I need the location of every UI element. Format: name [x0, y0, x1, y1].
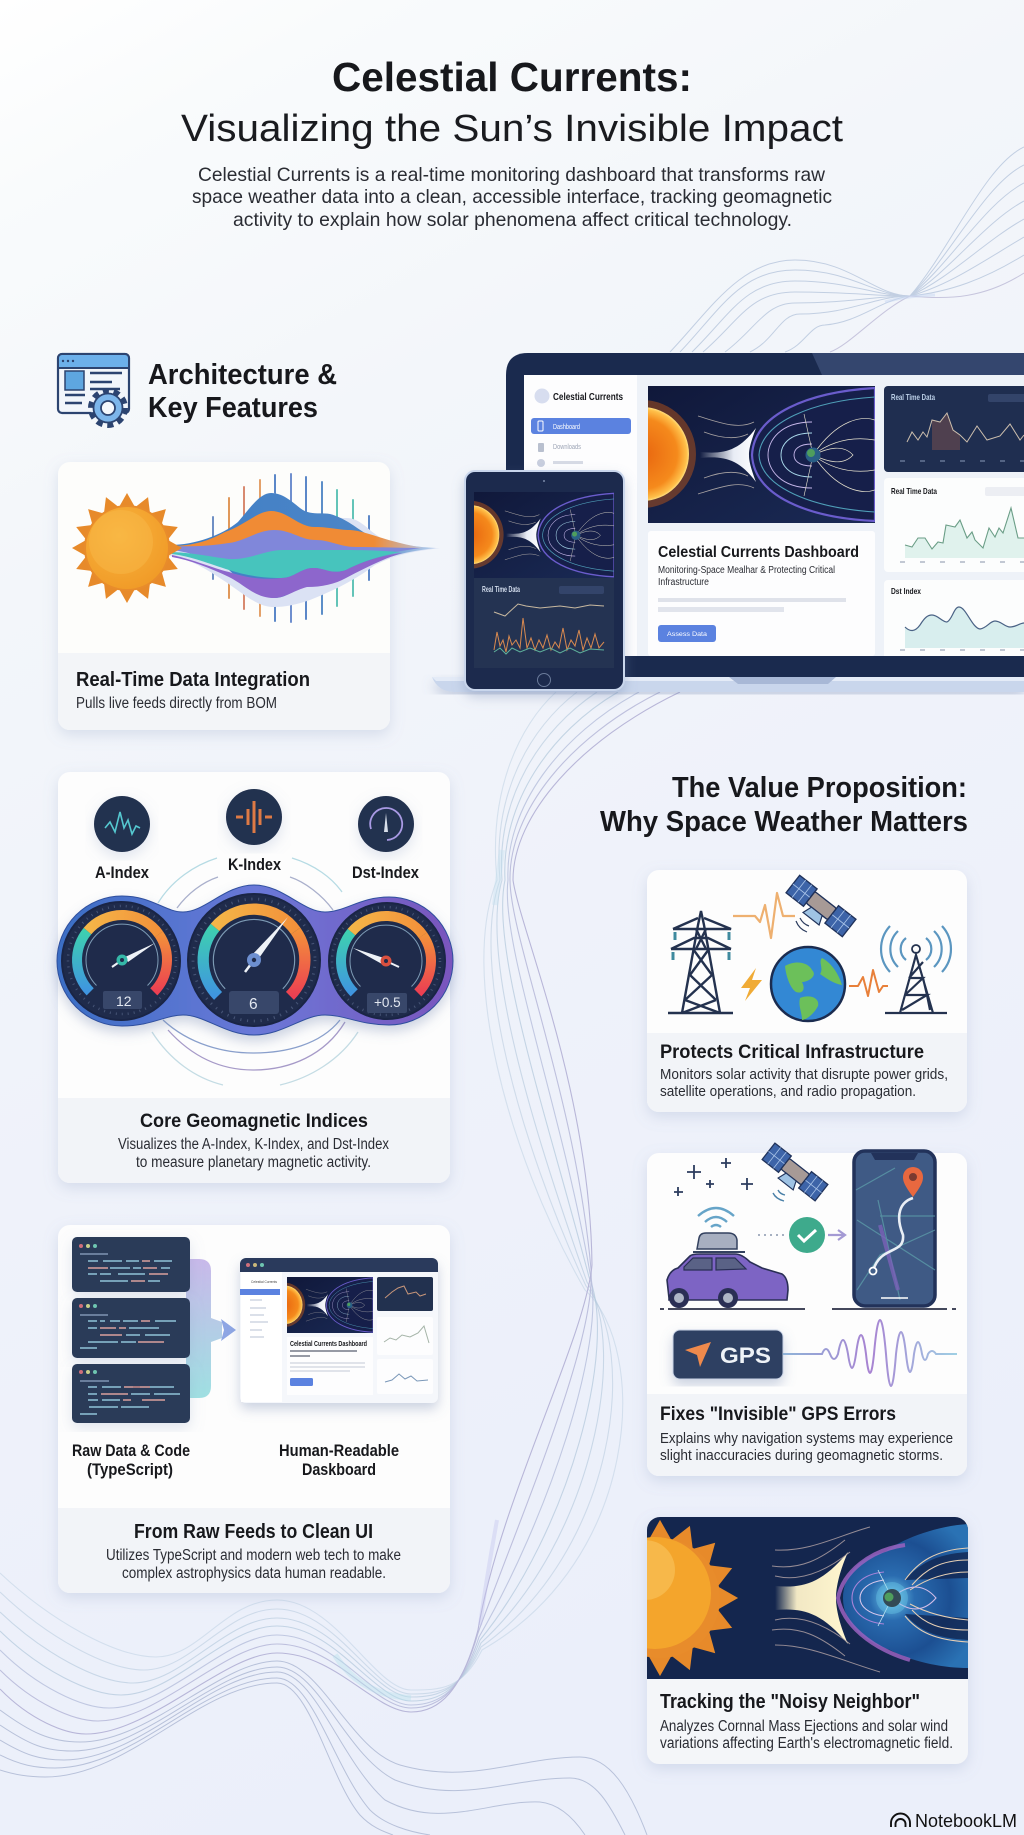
icon: car: [667, 1233, 788, 1308]
data stream bars: [213, 474, 369, 622]
gauge: A-index: [62, 902, 180, 1020]
card text: Real-Time Data Integration: [76, 669, 310, 691]
icon: lightning bolt: [741, 968, 762, 1001]
solar wind waveform: [170, 493, 440, 607]
panel: from raw feeds to clean UI: [58, 1225, 450, 1593]
panel: protects critical infrastructure: [647, 870, 967, 1112]
dashboard title card: Celestial Currents Dashboard: [658, 544, 859, 561]
icon: satellite: [783, 875, 856, 941]
sidebar: Downloads: [553, 444, 581, 451]
code panels: [72, 1237, 190, 1292]
dashboard title card: [648, 531, 875, 656]
gauge: K-index: 6: [249, 996, 258, 1013]
gauge cluster band: [57, 885, 453, 1035]
index labels: Dst-Index: [352, 863, 419, 882]
icon: architecture window and gear: [58, 354, 129, 425]
panel: core geomagnetic indices: to measure planetary magnetic activity.: [136, 1154, 371, 1171]
heading: value proposition: [600, 772, 968, 838]
gauge: Dst-index: +0.5: [374, 995, 401, 1010]
laptop dashboard: [432, 353, 1024, 692]
sidebar: [524, 375, 637, 656]
gauge: A-index: 12: [116, 993, 132, 1009]
panel: core geomagnetic indices: Visualizes the A-Index, K-Index, and Dst-Index: [118, 1136, 389, 1153]
icon: Dst-index: [358, 796, 414, 852]
mini dashboard: [240, 1258, 438, 1403]
chart: dst index: Dst Index: [891, 586, 921, 596]
chart: real time data dark: Real Time Data: [891, 392, 935, 402]
index labels: A-Index: [95, 863, 149, 882]
illustration: sun and magnetosphere: [647, 1517, 968, 1679]
logo: NotebookLM: NotebookLM: [915, 1810, 1017, 1831]
road lines: [660, 1308, 956, 1310]
panel: tracking the noisy neighbor: Analyzes Cornnal Mass Ejections and solar wind: [660, 1718, 948, 1735]
title: [181, 54, 843, 150]
icon: satellite: [759, 1143, 828, 1205]
icon: sun: [72, 493, 182, 603]
panel: fixes invisible GPS errors: [647, 1143, 967, 1476]
intro paragraph: activity to explain how solar phenomena affect critical technology.: [233, 209, 792, 231]
card text: Core Geomagnetic Indices: [140, 1110, 368, 1132]
panel: fixes invisible GPS errors: Explains why navigation systems may experience: [660, 1430, 953, 1447]
hero image: [588, 386, 875, 523]
index labels: [95, 855, 419, 882]
bracket arrow: [186, 1259, 236, 1398]
tablet dashboard: [437, 471, 624, 690]
panel: tracking the noisy neighbor: [644, 1517, 971, 1772]
card text: From Raw Feeds to Clean UI: [134, 1521, 373, 1543]
dashboard title card: Infrastructure: [658, 577, 709, 588]
chart: real time data light: Real Time Data: [891, 486, 937, 496]
title: Visualizing the Sun’s Invisible Impact: [181, 108, 843, 150]
icon: K-index: [226, 789, 282, 845]
diagram labels: Raw Data & Code: [72, 1441, 190, 1460]
title: Celestial Currents:: [332, 54, 692, 100]
diagram labels: (TypeScript): [87, 1460, 173, 1479]
GPS badge and wave: GPS: [720, 1343, 771, 1368]
heading: architecture and key features: [148, 359, 337, 424]
panel: real-time data integration: [58, 462, 440, 730]
dashboard title card: Monitoring-Space Mealhar & Protecting Critical: [658, 565, 835, 576]
intro paragraph: [192, 164, 832, 231]
icon: earth: [771, 947, 845, 1021]
icon: radio tower: [881, 926, 951, 1013]
mini dashboard: Celestial Currents: [251, 1279, 277, 1284]
chart: real time data light: [884, 478, 1024, 572]
panel: from raw feeds to clean UI: complex astrophysics data human readable.: [122, 1565, 386, 1582]
mini dashboard: Celestial Currents Dashboard: [290, 1341, 367, 1348]
card text: Protects Critical Infrastructure: [660, 1041, 924, 1063]
intro paragraph: Celestial Currents is a real-time monitoring dashboard that transforms raw: [198, 164, 826, 186]
panel: protects critical infrastructure: Monitors solar activity that disrupte power grids,: [660, 1066, 948, 1083]
tablet dashboard: Real Time Data: [482, 585, 520, 594]
intro paragraph: space weather data into a clean, accessible interface, tracking geomagnetic: [192, 186, 832, 208]
icon: phone with route: [854, 1151, 935, 1306]
panel: core geomagnetic indices: [57, 772, 453, 1183]
icon: A-index: [94, 796, 150, 852]
icon: stars: [674, 1158, 753, 1196]
panel: from raw feeds to clean UI: Utilizes TypeScript and modern web tech to make: [106, 1547, 401, 1564]
diagram labels: [72, 1441, 399, 1479]
icon: signal pulse: [733, 893, 795, 938]
panel: real-time data integration: Pulls live feeds directly from BOM: [76, 695, 277, 712]
laptop base: [432, 677, 1024, 692]
check mark and arrow: [758, 1217, 845, 1253]
panel: fixes invisible GPS errors: slight inaccuracies during geomagnetic storms.: [660, 1447, 943, 1464]
diagram labels: Daskboard: [302, 1460, 376, 1479]
card text: Tracking the "Noisy Neighbor": [660, 1691, 920, 1713]
dashboard title card: Assess Data: [667, 631, 707, 638]
card text: Fixes "Invisible" GPS Errors: [660, 1403, 896, 1425]
icon: red pulse: [849, 970, 888, 996]
gauge: K-index: [188, 894, 320, 1026]
diagram labels: Human-Readable: [279, 1441, 399, 1460]
heading: value proposition: Why Space Weather Matters: [600, 806, 968, 838]
index labels: K-Index: [228, 855, 281, 874]
icon: power tower: [668, 911, 733, 1013]
chart: dst index: [884, 580, 1024, 656]
icon: wifi: [698, 1208, 734, 1227]
sidebar: Celestial Currents: [553, 392, 623, 403]
GPS badge and wave: [673, 1320, 957, 1386]
heading: architecture and key features: Architecture &: [148, 359, 337, 391]
gauge: Dst-index: [329, 903, 445, 1019]
panel: tracking the noisy neighbor: variations affecting Earth's electromagnetic field.: [660, 1735, 953, 1752]
heading: value proposition: The Value Proposition:: [672, 772, 967, 804]
sidebar: Dashboard: [553, 424, 580, 431]
chart: real time data dark: [884, 386, 1024, 472]
panel: protects critical infrastructure: satellite operations, and radio propagation.: [660, 1083, 916, 1100]
orbit arcs: [152, 858, 358, 1085]
heading: architecture and key features: Key Features: [148, 392, 318, 424]
